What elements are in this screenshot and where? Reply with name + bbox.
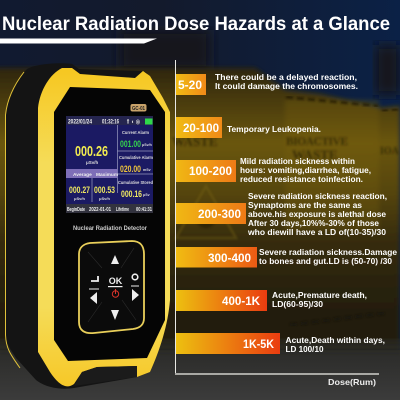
main reading: 000.26 [75,144,108,160]
row: 1K-5K: LD 100/10 [286,345,324,354]
screen: 020.00 [120,164,141,175]
row: 5-20: 5-20 [178,80,202,92]
row: 300-400: 300-400 [208,253,251,265]
row: 1K-5K [176,333,385,354]
OK power button: OK [109,276,123,286]
device: radiation detector [6,63,170,389]
row: 300-400: Severe radiation sickness.Damage [259,248,398,257]
left arrow and return [89,276,99,304]
screen: μSv/h [74,196,85,201]
title: Nuclear Radiation Dose Hazards at a Glance [2,14,390,35]
keypad [79,241,144,333]
screen: μSv/h [86,160,99,165]
row: 1K-5K: Acute,Death within days, [286,336,385,345]
screen: Average [73,172,92,178]
background: night sky and waste drums: WASTE [172,134,218,149]
model badge: GC-01 [132,106,145,112]
axis baseline [175,373,379,375]
screen footer [66,204,153,213]
screen grid lines [92,125,153,202]
background: night sky and waste drums: BIOACTIVE [286,136,348,148]
row: 100-200: Mild radiation sickness within [240,157,355,166]
row: 100-200: 100-200 [189,166,232,178]
screen: 01:32:16 [102,118,119,126]
row: 200-300: After 30 days,10%%-30% of those [248,219,380,228]
row: 20-100: Temporary Leukopenia. [227,125,321,134]
screen: 000.16 [121,189,142,200]
screen: 2022-01-01 [89,207,111,213]
right arrow and gear [131,274,139,301]
row: 20-100 [176,117,321,138]
row: 100-200: reduced resistance toinfection. [240,175,363,184]
screen: Lifetime [116,207,129,213]
screen: 00:41:31 [136,207,152,213]
black face [54,87,165,361]
device body [6,63,170,389]
row: 5-20: It could damage the chromosomes. [215,82,358,91]
up arrow [111,255,119,264]
background: night sky and waste drums: IOA [380,146,400,157]
cumulative stored: Cumulative Stored [118,180,153,186]
background: night sky and waste drums: WASTE [292,147,338,162]
screen [66,116,153,213]
screen: 001.00 [120,139,141,150]
row: 200-300: Symaptoms are the same as [248,201,363,210]
average reading: 000.27 [69,185,90,196]
device name: Nuclear Radiation Detector [73,225,148,232]
row: 200-300: 200-300 [198,209,241,221]
row: 100-200: hours: vomiting,diarrhea, fatigue, [240,166,371,175]
row: 400-1K [176,290,367,311]
screen: ⇑ ◐ ◎ [126,118,141,126]
row: 100-200 [176,157,371,184]
yellow front frame [38,68,170,386]
title underline [0,38,157,44]
chart axes [176,60,379,374]
screen: BeginDate [67,207,85,213]
down arrow [111,310,119,320]
row: 5-20: There could be a delayed reaction, [215,73,357,82]
screen: μSv/h [142,143,152,147]
background: night sky and waste drums: CTIVE [182,117,220,131]
row: 400-1K: 400-1K [222,296,261,308]
thin yellow left edge [6,72,24,368]
screen: μSv [143,193,150,197]
black notch bottom [74,366,137,386]
screen: 2022/01/24 [68,118,92,126]
current alarm: Current Alarm [122,130,149,136]
axis label: Dose(Rum) [328,377,376,387]
cumulative alarm: Cumulative Alarm [119,155,153,161]
row: 200-300: above.his exposure is alethal dose [248,210,387,219]
row: 1K-5K: 1K-5K [243,339,275,351]
row: 20-100: 20-100 [183,123,219,135]
row: 200-300: who diewill have a LD of(10-35)/30 [247,228,387,237]
screen status bar [66,116,153,125]
maximum reading: 000.53 [94,185,115,196]
row: 300-400 [176,247,398,268]
model badge [130,104,146,112]
row: 400-1K: Acute,Premature death, [272,291,367,300]
average and maximum header [66,169,118,178]
row: 300-400: to bones and gut.LD is (50-70) /30 [259,257,393,266]
row: 200-300 [176,192,387,237]
row: 200-300: Severe radiation sickness reaction, [248,192,387,201]
row: 5-20 [176,73,358,95]
screen: Maximum [96,172,118,178]
screen: mSv [143,168,151,172]
row: 400-1K: LD(60-95)/30 [272,300,324,309]
screen: μSv/h [99,196,110,201]
